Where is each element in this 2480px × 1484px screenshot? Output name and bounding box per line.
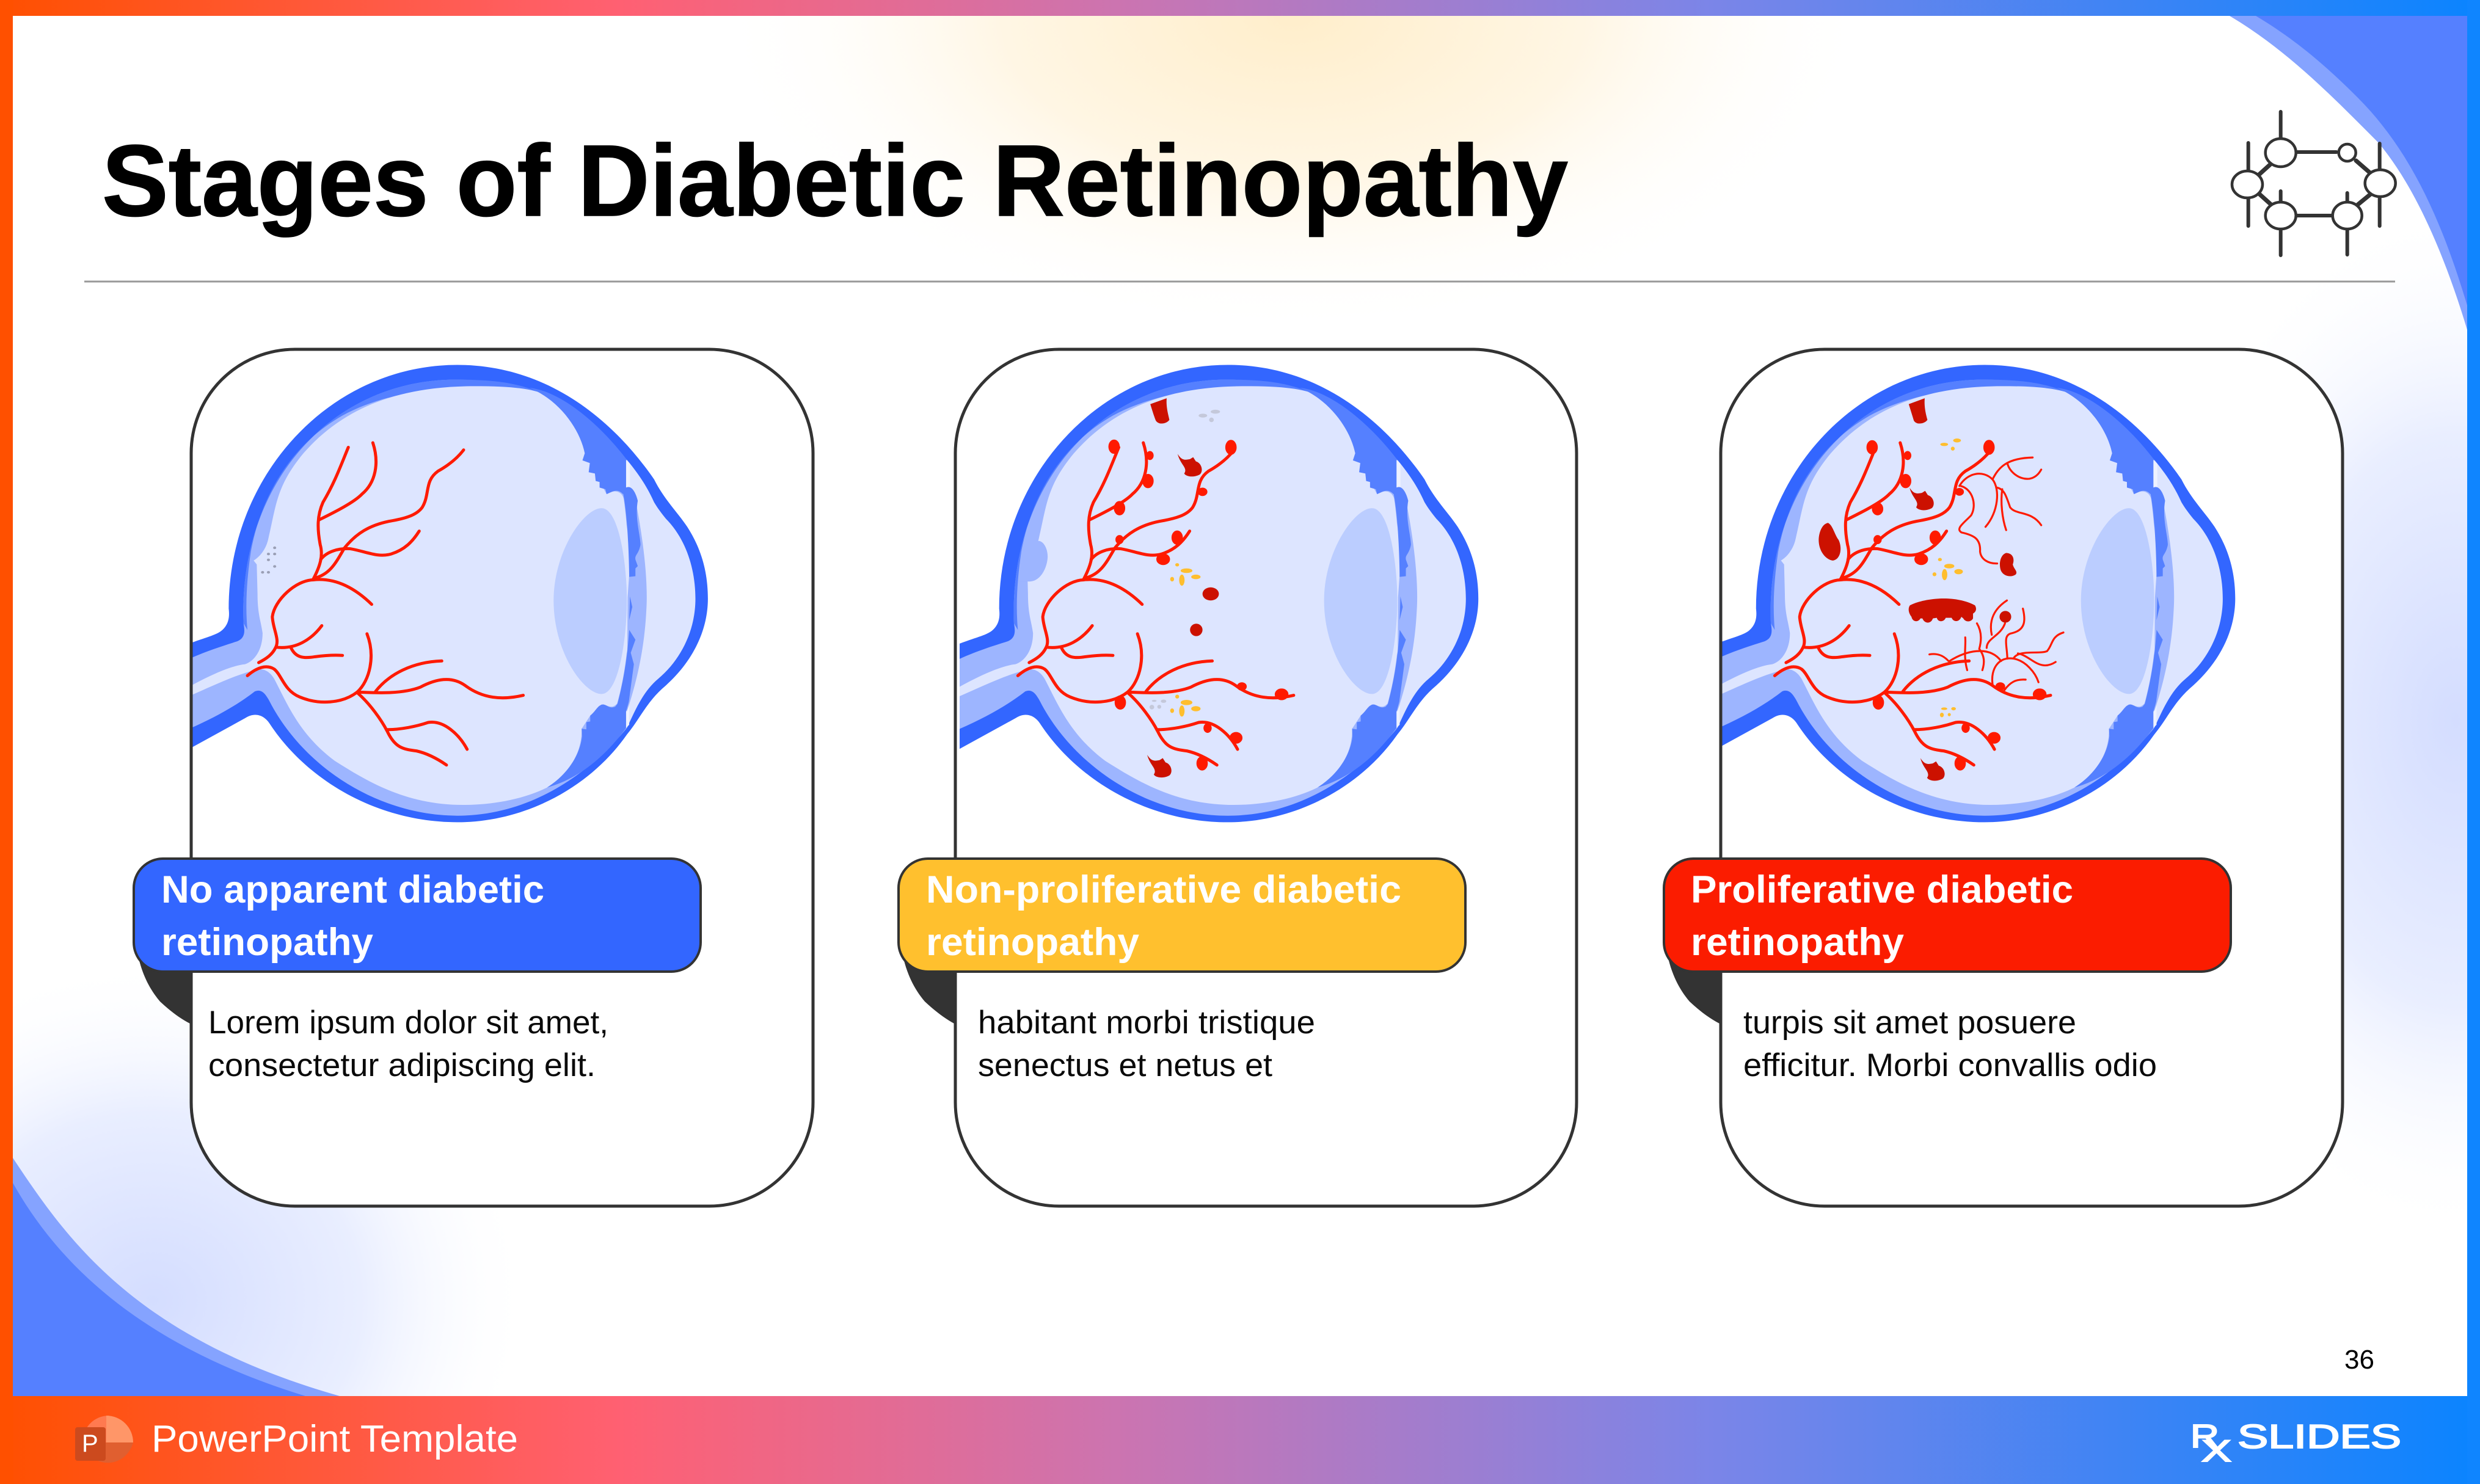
card background [955, 349, 1577, 1206]
body text: turpis sit amet posuere [1743, 1005, 2076, 1041]
body text: efficitur. Morbi convallis odio [1743, 1047, 2157, 1083]
heading tail [1667, 953, 1721, 1024]
heading text: retinopathy [1691, 921, 1904, 964]
heading tail [137, 953, 191, 1024]
logo: Rx Slides: SLIDES [2237, 1417, 2401, 1455]
eye illustration, stage 1 [187, 365, 708, 822]
icon: molecule [2232, 112, 2396, 255]
corner decoration: top right [2230, 16, 2467, 330]
card outline [191, 349, 813, 1206]
card outline [1721, 349, 2343, 1206]
heading pill [1664, 859, 2231, 972]
body text: Lorem ipsum dolor sit amet, [208, 1005, 608, 1041]
card background [1721, 349, 2343, 1206]
logo: Rx Slides: X [2201, 1434, 2231, 1468]
panel: proliferative diabetic retinopathy [1664, 349, 2343, 1206]
eye illustration, stage 2 [957, 365, 1478, 822]
eye illustration, stage 3 [1714, 365, 2235, 822]
logo: Rx Slides: R [2190, 1418, 2219, 1455]
heading text: retinopathy [161, 921, 373, 964]
heading text: No apparent diabetic [161, 868, 544, 911]
heading text: retinopathy [926, 921, 1139, 964]
card background [191, 349, 813, 1206]
heading tail [902, 953, 955, 1024]
logo: Rx Slides [2190, 1417, 2401, 1468]
icon: PowerPoint logo: P [82, 1430, 98, 1457]
divider [84, 281, 2395, 282]
body text: senectus et netus et [978, 1047, 1272, 1083]
panel: non-proliferative diabetic retinopathy [899, 349, 1577, 1206]
body text: consectetur adipiscing elit. [208, 1047, 596, 1083]
heading pill [134, 859, 701, 972]
panel: no apparent diabetic retinopathy [134, 349, 813, 1206]
heading text: Proliferative diabetic [1691, 868, 2073, 911]
title: Stages of Diabetic Retinopathy [102, 125, 1568, 238]
corner decoration: bottom left [13, 1158, 340, 1396]
icon: PowerPoint logo [75, 1416, 133, 1463]
page number: 36 [2344, 1345, 2374, 1375]
heading text: Non-proliferative diabetic [926, 868, 1401, 911]
card outline [955, 349, 1577, 1206]
footer label: PowerPoint Template [151, 1418, 518, 1460]
body text: habitant morbi tristique [978, 1005, 1315, 1041]
heading pill [899, 859, 1465, 972]
